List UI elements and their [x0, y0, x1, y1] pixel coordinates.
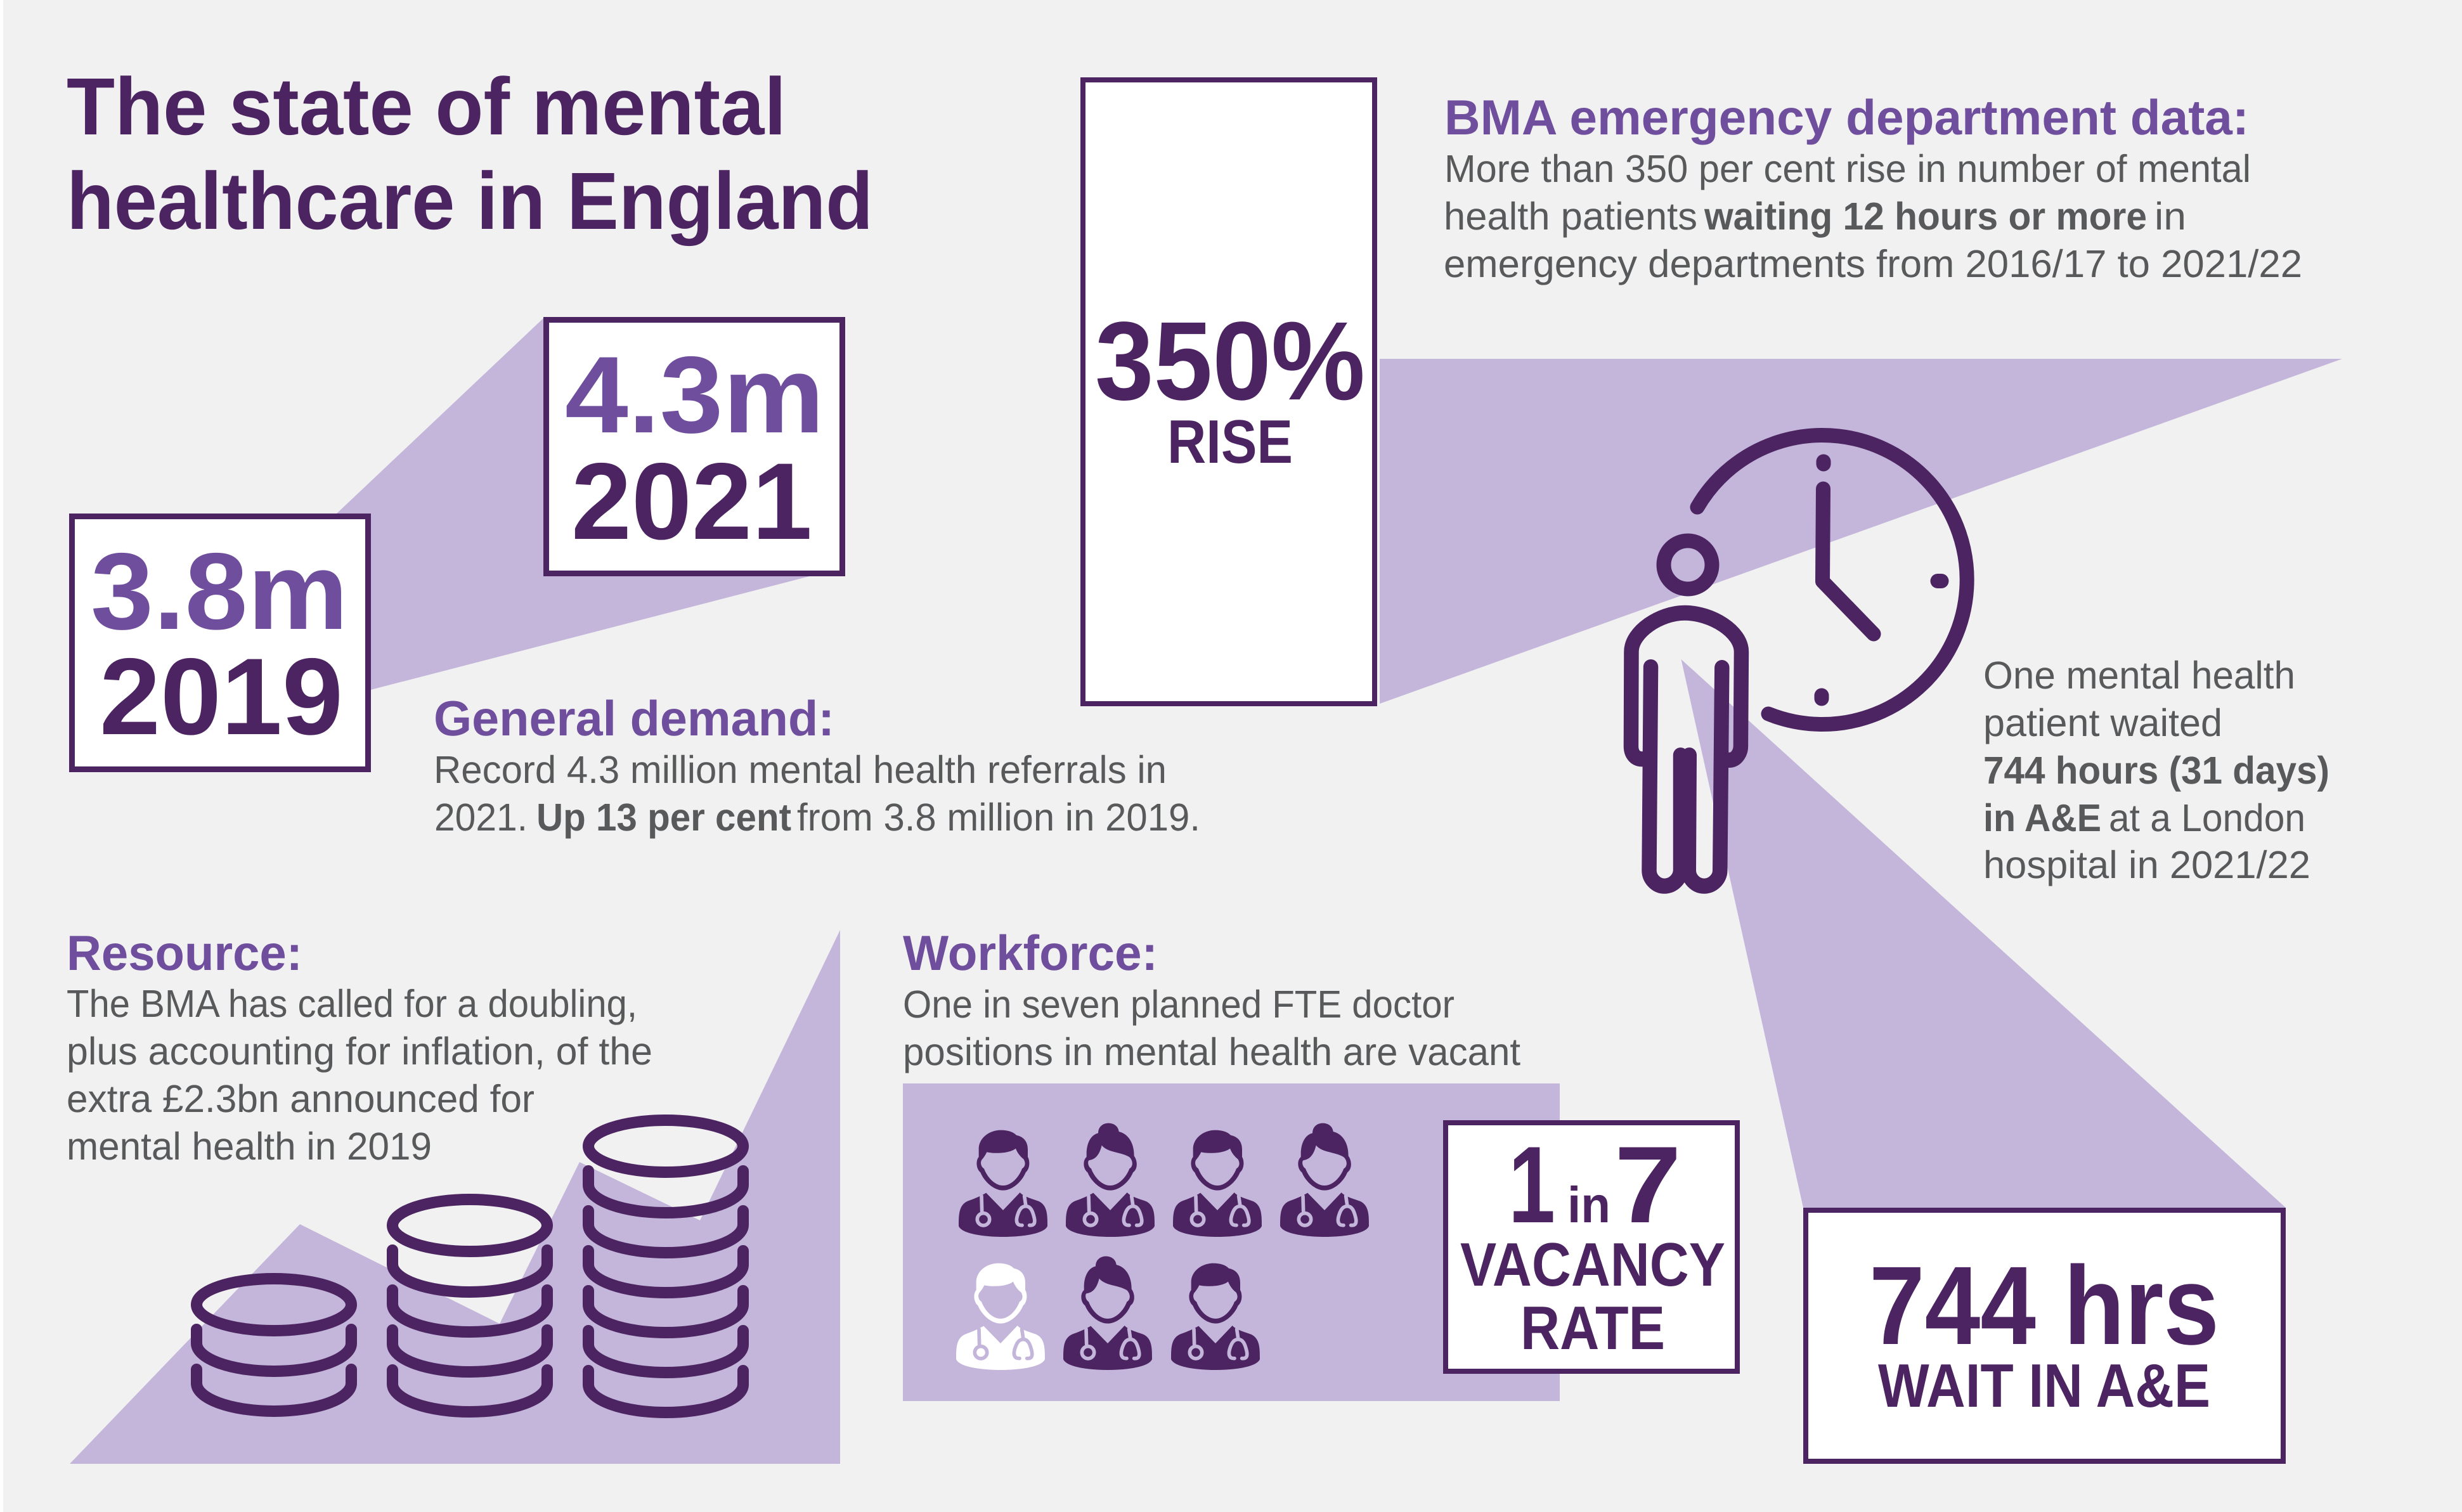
text block: resource: The BMA has called for a doubling,: [67, 982, 637, 1025]
text block: BMA emergency department data: emergency departments from 2016/17 to 2021/22: [1444, 242, 2302, 285]
icon: clock: [1697, 436, 1967, 725]
text block: resource: Resource:: [67, 925, 302, 981]
chart: wedge from person to 744 hrs box: [1681, 659, 2286, 1208]
box: 3.8m 2019: [72, 516, 368, 770]
icon: person: [1631, 541, 1741, 886]
text block: resource: mental health in 2019: [67, 1125, 432, 1168]
text block: resource: [67, 925, 652, 1168]
box: 744 hrs wait in A&E: 744 hrs: [1869, 1244, 2219, 1368]
box: 1 in 7 vacancy rate: 7: [1614, 1124, 1681, 1246]
text block: general demand: General demand:: [434, 690, 834, 746]
text block: 744 hours: One mental health: [1983, 654, 2295, 697]
text block: general demand: [434, 690, 1200, 839]
icon: vacant doctor in white: [956, 1263, 1045, 1370]
text block: resource: extra £2.3bn announced for: [67, 1077, 535, 1120]
box: 1 in 7 vacancy rate: 1: [1508, 1124, 1555, 1246]
text block: 744 hours: patient waited: [1983, 701, 2222, 744]
box: 3.8m 2019: 3.8m: [91, 531, 348, 652]
text block: BMA emergency department data: health patients: [1444, 195, 1697, 238]
heading: title: The state of mental: [67, 61, 786, 152]
box: 350% rise: RISE: [1167, 407, 1293, 476]
box: 744 hrs wait in A&E: [1806, 1210, 2283, 1461]
box: 1 in 7 vacancy rate: in: [1567, 1177, 1610, 1233]
box: 4.3m 2021: [547, 320, 842, 573]
text block: workforce: Workforce:: [903, 925, 1158, 981]
heading: title: [67, 61, 873, 247]
box: 744 hrs wait in A&E: WAIT IN A&E: [1878, 1351, 2210, 1420]
heading: title: healthcare in England: [67, 156, 873, 247]
coin stack: tall: [588, 1120, 743, 1412]
text block: general demand: Record 4.3 million mental health referrals in: [434, 748, 1167, 791]
text block: 744 hours: at a London: [2109, 796, 2305, 839]
text block: BMA emergency department data: [1444, 89, 2302, 285]
icon: doctor row 1: [959, 1123, 1369, 1237]
text block: workforce: One in seven planned FTE doctor: [903, 983, 1455, 1026]
panel: workforce doctors: [903, 1083, 1560, 1401]
box: 1 in 7 vacancy rate: VACANCY: [1460, 1230, 1725, 1299]
panel: general demand comparison: [72, 318, 845, 770]
chart: wedge from 350% box to the right: [1380, 359, 2342, 704]
text block: BMA emergency department data: More than 350 per cent rise in number of mental: [1444, 147, 2251, 190]
text block: general demand: Up 13 per cent: [536, 796, 791, 839]
text block: workforce: [903, 925, 1520, 1073]
coin stack: short: [197, 1279, 351, 1411]
icon: coin stacks: [197, 1120, 743, 1412]
box: 1 in 7 vacancy rate: [1446, 1123, 1737, 1371]
box: 350% rise: [1083, 80, 1375, 704]
box: 3.8m 2019: 2019: [100, 636, 343, 758]
text block: 744 hours: in A&E: [1983, 796, 2101, 839]
chart: resource rising wedge: [70, 930, 840, 1464]
chart: rising wedge between 2019 and 2021: [337, 318, 845, 690]
text block: general demand: 2021.: [434, 796, 528, 839]
box: 1 in 7 vacancy rate: RATE: [1520, 1293, 1665, 1362]
text block: BMA emergency department data: in: [2154, 195, 2186, 238]
text block: 744 hours: hospital in 2021/22: [1983, 843, 2310, 886]
text block: resource: plus accounting for inflation, of the: [67, 1030, 652, 1073]
icon: doctor row 2: [1063, 1257, 1260, 1370]
box: 4.3m 2021: 2021: [571, 441, 812, 562]
text block: workforce: positions in mental health are vacant: [903, 1030, 1520, 1073]
text block: BMA emergency department data: waiting 12 hours or more: [1704, 195, 2147, 238]
text block: general demand: from 3.8 million in 2019.: [797, 796, 1200, 839]
text block: 744 hours: [1983, 654, 2329, 886]
box: 350% rise: 350%: [1095, 299, 1365, 423]
text block: 744 hours: 744 hours (31 days): [1983, 749, 2329, 792]
box: 4.3m 2021: 4.3m: [565, 334, 824, 456]
text block: BMA emergency department data: BMA emergency department data:: [1444, 89, 2249, 145]
coin stack: medium: [392, 1199, 547, 1412]
